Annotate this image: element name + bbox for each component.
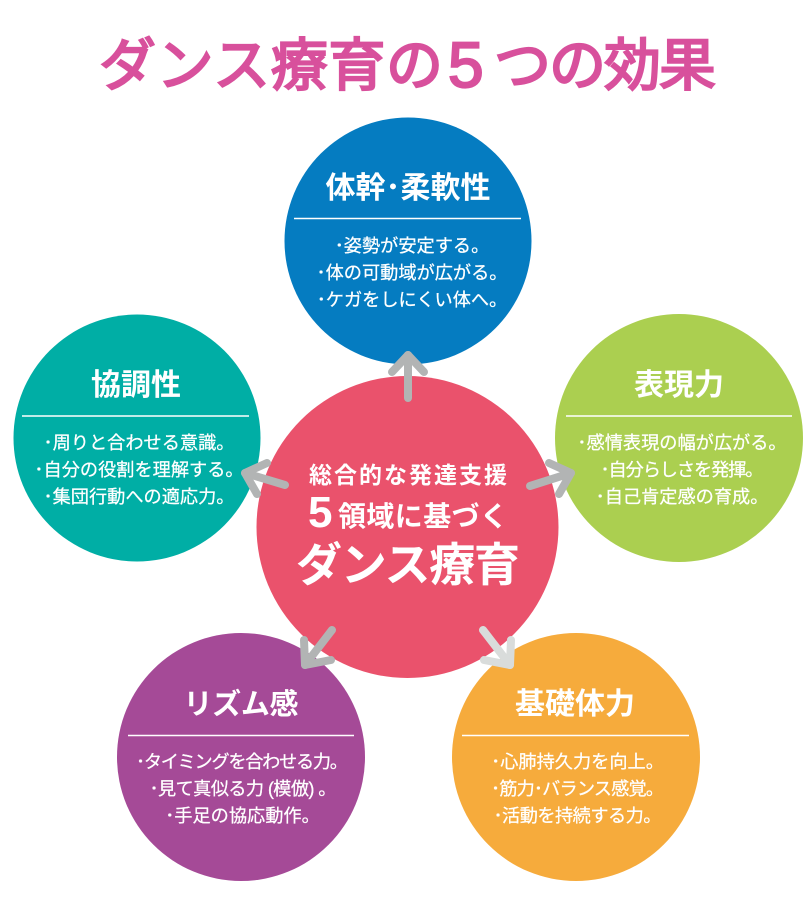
- text block: 基礎体力 effects: ･筋力･バランス感覚。: [491, 779, 664, 799]
- heading: リズム感: リズム感: [184, 687, 298, 721]
- arrow: to bottom right: [483, 630, 511, 665]
- arrow: to left: [245, 463, 285, 494]
- text block: 体幹・柔軟性 effects: ･姿勢が安定する。: [335, 236, 489, 256]
- text block: 基礎体力 effects: [491, 752, 664, 826]
- text: 5領域に基づく: 領域に基づく: [338, 501, 508, 532]
- text block: リズム感 effects: ･手足の協応動作。: [165, 806, 320, 826]
- text block: 体幹・柔軟性 effects: ･体の可動域が広がる。: [317, 263, 507, 283]
- panel: 体幹・柔軟性: [284, 118, 532, 364]
- panel: 表現力: [555, 314, 803, 562]
- text: ダンス療育: ダンス療育: [296, 539, 520, 591]
- arrow: to bottom left: [304, 630, 332, 665]
- text block: 協調性 effects: ･周りと合わせる意識。: [44, 433, 234, 453]
- text block: 体幹・柔軟性 effects: ･ケガをしにくい体へ。: [317, 290, 507, 310]
- text: 5領域に基づく: 5: [308, 488, 332, 537]
- text block: リズム感 effects: ･見て真似る力 (模倣) 。: [150, 779, 336, 799]
- text block: 基礎体力 effects: ･活動を持続する力。: [494, 806, 662, 826]
- text block: 表現力 effects: ･感情表現の幅が広がる。: [577, 433, 787, 453]
- text block: 協調性 effects: [34, 433, 244, 507]
- heading: 表現力: 表現力: [634, 369, 724, 402]
- text block: 基礎体力 effects: ･心肺持久力を向上。: [491, 752, 664, 772]
- text: 5領域に基づく: [308, 488, 508, 537]
- text block: 表現力 effects: ･自分らしさを発揮。: [600, 460, 764, 480]
- heading: 体幹・柔軟性: 体幹･柔軟性: [326, 172, 490, 205]
- title: 5: [448, 29, 484, 101]
- panel: 基礎体力: [452, 633, 700, 881]
- arrow: to right: [530, 463, 571, 494]
- text: 総合的な発達支援: 総合的な発達支援: [309, 462, 507, 488]
- panel: リズム感: [117, 633, 365, 881]
- heading: 協調性: 協調性: [91, 369, 181, 402]
- text block: リズム感 effects: ･タイミングを合わせる力。: [136, 752, 348, 772]
- text block: 体幹・柔軟性 effects: [317, 236, 507, 310]
- text block: 表現力 effects: [577, 433, 787, 507]
- title: [99, 29, 716, 101]
- text block: 表現力 effects: ･自己肯定感の育成。: [596, 487, 768, 507]
- title: つの効果: [494, 34, 716, 98]
- text block: 協調性 effects: ･自分の役割を理解する。: [34, 460, 244, 480]
- title: ダンス療育の: [99, 34, 443, 98]
- text block: 協調性 effects: ･集団行動への適応力。: [44, 487, 234, 507]
- heading: 基礎体力: 基礎体力: [515, 688, 635, 721]
- panel: 協調性: [14, 314, 260, 562]
- panel: center circle: [256, 376, 558, 678]
- text block: リズム感 effects: [136, 752, 348, 826]
- arrow: to top: [392, 355, 424, 398]
